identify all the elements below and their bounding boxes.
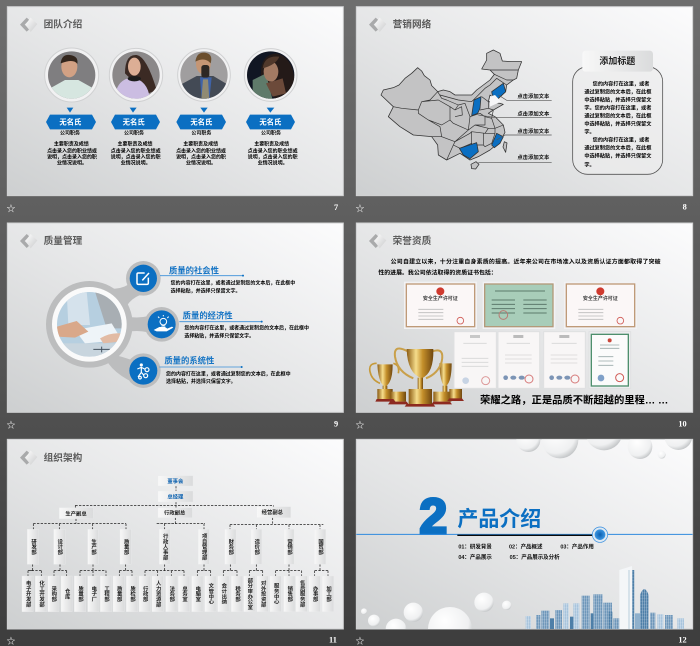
certificate 7: [589, 332, 631, 388]
certificate 1: [404, 282, 477, 329]
page number: 10: [678, 419, 687, 428]
sub-department boxes: 人力资源部: [155, 580, 161, 608]
text panel: 字。: [584, 160, 595, 168]
heading: 营销网络: [393, 19, 432, 31]
icon: star: ☆: [356, 636, 365, 646]
member 3: 公司职务: [191, 129, 211, 136]
certificate 2: [483, 282, 555, 329]
certificate 1: 安全生产许可证: [423, 295, 458, 302]
certificate 6: [544, 332, 585, 388]
text panel: 您的内容打在这里，或者: [593, 135, 649, 143]
slogan: 荣耀之路，正是品质不断超越的里程… …: [480, 393, 668, 406]
sub-department boxes: 会计出纳: [220, 582, 227, 606]
section title: 产品介绍: [457, 508, 541, 531]
text panel: 您的内容打在这里，或者: [593, 80, 649, 88]
connector lines: [28, 486, 328, 576]
member 2: 业情况说明。: [121, 159, 151, 166]
text panel: 中选择粘贴，并选择只保留文: [584, 119, 652, 127]
certificate 4: [454, 332, 496, 388]
department boxes: 生产部: [90, 537, 97, 556]
icon: header chevron: [20, 234, 37, 248]
certificate 5: [498, 332, 540, 388]
panel: slide 8 marketing network: [356, 7, 693, 213]
vice president boxes: 生产副总: [65, 509, 87, 517]
certificate 3: [564, 282, 637, 329]
sub-department boxes: 税务部: [234, 584, 241, 603]
item 1: [130, 265, 295, 294]
item 3: 您的内容打在这里，或者通过复制您的文本后，在此框中: [166, 370, 291, 377]
icon: header chevron: [369, 18, 386, 32]
sub-department boxes: 电脑室: [194, 584, 201, 602]
icon: header chevron: [20, 451, 37, 465]
text panel: 通过复制您的文本后，在此框: [584, 88, 651, 96]
member 2: 公司职务: [124, 129, 144, 136]
heading: 质量管理: [44, 235, 83, 247]
sub-department boxes: 电子厂: [90, 584, 97, 603]
sub-department boxes: 文管中心: [207, 582, 214, 605]
page number: 12: [678, 636, 687, 645]
sub-department boxes: 对外投资部: [260, 579, 266, 608]
intro paragraph: 公司自建立以来，十分注重自身素质的提高。近年来公司在市场准入以及资质认证方面都取得了突破: [391, 257, 661, 265]
intro paragraph: 性的进展。我公司依法取得的资质证书包括：: [378, 269, 497, 277]
member 2: 说明，点击录入您的职: [111, 154, 161, 161]
text panel: 添加标题: [599, 55, 635, 66]
member 3: 业情况说明。: [186, 159, 216, 166]
department boxes: 行政人事部: [162, 532, 168, 561]
panel: slide 10 honors: [356, 223, 693, 430]
text panel: 中选择粘贴，并选择只保留文: [584, 151, 652, 159]
sub-department boxes: 工程部: [103, 585, 110, 603]
text panel: 通过复制您的文本后，在此框: [584, 111, 651, 119]
department boxes: [27, 529, 326, 564]
sub-department boxes: 化工开发部: [38, 579, 45, 608]
section contents list: 03：产品作用: [560, 543, 594, 551]
sub-department boxes: 行政部: [142, 584, 148, 603]
icon: header chevron: [20, 18, 37, 32]
member 1: [46, 108, 97, 166]
member 3: 点击录入您的职业绩或: [176, 147, 226, 154]
icon: star: ☆: [7, 636, 16, 646]
department boxes: 财务部: [227, 537, 234, 556]
section contents list: 01：研发背景: [458, 543, 492, 551]
skyline: [526, 566, 684, 629]
panel: slide 12 section cover: [356, 438, 694, 645]
panel: slide 9 quality management: [7, 223, 343, 430]
sub-department boxes: 总务室: [181, 584, 188, 602]
portrait: man on phone: [178, 49, 230, 101]
member 4: 主要职责及成绩: [254, 141, 289, 148]
sub-department boxes: 加工部: [325, 584, 332, 603]
section contents list: 02：产品概述: [509, 543, 543, 551]
member 4: [246, 108, 298, 166]
panel: slide 7 team: [7, 7, 343, 213]
item 2: 您的内容打在这里，或者通过复制您的文本后，在此框中: [184, 324, 309, 331]
big number 2: 2: [419, 489, 447, 545]
member 2: 点击录入您的职业绩或: [111, 147, 161, 154]
sub-department boxes: 售后服务部: [299, 579, 305, 608]
hub diagram: [46, 261, 179, 388]
member 2: 无名氏: [123, 117, 145, 126]
vice president boxes: 行政副总: [164, 509, 186, 517]
member 1: 业情况说明。: [57, 159, 87, 166]
sub-department boxes: 服务中心: [273, 583, 279, 605]
map callouts: 点击添加文本: [517, 92, 550, 100]
member 3: 主要职责及成绩: [183, 141, 218, 148]
department boxes: 项目管理部: [201, 533, 207, 561]
icon: header chevron: [369, 234, 386, 248]
member 1: 点击录入您的职业绩或: [47, 147, 97, 154]
member 3: 说明，点击录入您的职: [176, 154, 226, 161]
portrait: man: [45, 48, 99, 102]
sub-department boxes: 部分审办公室: [246, 576, 253, 610]
map callouts: 点击添加文本: [517, 109, 550, 117]
map callouts: 点击添加文本: [517, 127, 550, 135]
page number: 9: [334, 419, 338, 428]
text panel: [573, 51, 663, 174]
portrait: woman: [109, 48, 163, 102]
icon: star: ☆: [7, 203, 16, 213]
heading: 荣誉资质: [393, 235, 432, 247]
sub-department boxes: 质量部: [77, 584, 84, 603]
member 4: 业情况说明。: [258, 159, 288, 166]
sub-department boxes: 质量部: [116, 584, 122, 603]
icon: lightbulb on hand: [154, 315, 173, 331]
item 2: 质量的经济性: [183, 311, 233, 321]
page number: 11: [329, 636, 337, 645]
department boxes: 造价部: [253, 537, 260, 556]
department boxes: 研发部: [30, 538, 37, 556]
member 3: [176, 108, 226, 166]
top level boxes: [158, 476, 193, 502]
map callouts: [478, 92, 552, 162]
member 1: 无名氏: [59, 117, 82, 126]
section contents list: 05：产品展示及分析: [510, 553, 560, 561]
sub-department boxes: 质检部: [129, 584, 136, 603]
member 4: 说明，点击录入您的职: [248, 154, 298, 161]
item 1: 选择粘贴，并选择只保留文字。: [171, 287, 240, 294]
department boxes: 营销部: [286, 537, 293, 556]
item 3: 质量的系统性: [164, 356, 215, 366]
department boxes: 质量部: [123, 537, 129, 556]
department boxes: 设计部: [56, 537, 63, 556]
sub-department boxes: [22, 576, 334, 612]
heading: 组织架构: [44, 452, 83, 464]
vice president boxes: [59, 507, 291, 519]
certificate 3: 安全生产许可证: [583, 295, 618, 302]
member 2: [111, 108, 161, 166]
member 1: 主要职责及成绩: [54, 141, 89, 148]
item 2: [148, 310, 309, 339]
text panel: 字。: [584, 127, 595, 135]
member 2: 主要职责及成绩: [118, 141, 152, 148]
icon: star: ☆: [7, 420, 16, 430]
divider with marker: [356, 527, 693, 542]
department boxes: 国贸部: [317, 538, 324, 556]
top level boxes: 董事会: [167, 477, 184, 485]
member 1: 说明，点击录入您的职: [47, 154, 97, 161]
sub-department boxes: 销售部: [286, 584, 293, 603]
icon: star: ☆: [356, 203, 365, 213]
vice president boxes: 经营副总: [262, 508, 284, 516]
sub-department boxes: 采购部: [50, 584, 57, 603]
page number: 8: [683, 203, 687, 212]
item 1: 您的内容打在这里，或者通过复制您的文本后，在此框中: [171, 280, 295, 287]
item 2: 选择粘贴，并选择只保留文字。: [184, 332, 254, 339]
map callouts: 点击添加文本: [517, 153, 550, 161]
sub-department boxes: 办事部: [312, 584, 318, 603]
map of China: [381, 50, 522, 169]
member 4: 公司职务: [261, 129, 281, 136]
text panel: 字。您的内容打在这里，或者: [584, 104, 651, 112]
icon: edit: [137, 273, 149, 284]
top level boxes: 总经理: [167, 493, 184, 501]
member 3: 无名氏: [190, 117, 213, 126]
page number: 7: [334, 203, 338, 212]
member 4: 无名氏: [259, 117, 282, 126]
item 1: 质量的社会性: [169, 265, 220, 275]
heading: 团队介绍: [44, 19, 83, 31]
member 4: 点击录入您的职业绩或: [248, 147, 298, 154]
text panel: 中选择粘贴，并选择只保留文: [584, 95, 652, 103]
trophies: [370, 348, 464, 407]
section contents list: 04：产品展示: [458, 553, 492, 561]
text panel: 通过复制您的文本后，在此框: [584, 143, 651, 151]
icon: figure and gears: [137, 364, 149, 379]
item 3: 选择粘贴，并选择只保留文字。: [166, 378, 236, 385]
portrait: woman dark: [244, 49, 297, 101]
sub-department boxes: 仓库: [64, 587, 70, 600]
member 1: 公司职务: [60, 129, 80, 136]
intro paragraph: [378, 257, 661, 277]
icon: star: ☆: [356, 420, 365, 430]
section contents list: [458, 543, 594, 561]
decorative bubbles: [361, 439, 692, 629]
item 3: [129, 356, 291, 385]
sub-department boxes: 电子开发部: [25, 579, 31, 608]
sub-department boxes: 法务部: [168, 584, 175, 603]
panel: slide 11 org chart: [7, 439, 343, 646]
